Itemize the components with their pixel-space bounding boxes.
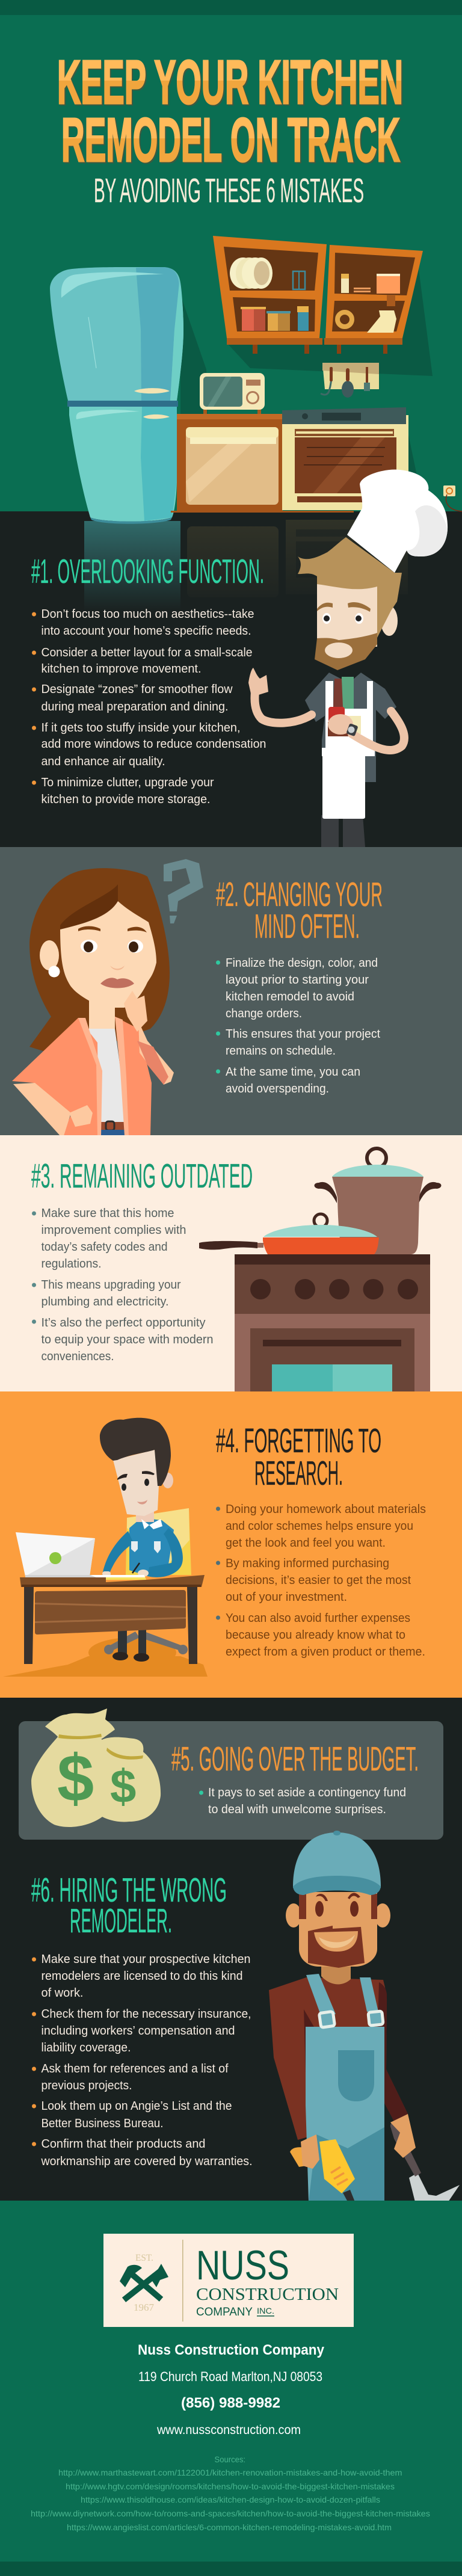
wordmark [196,2242,339,2319]
pen and hand [102,1563,149,1577]
panel: mistake 6 hiring the wrong remodeler [31,1831,460,2202]
bullet list: You can also avoid further expenses [226,1612,410,1625]
bullet list: regulations. [41,1257,101,1271]
tee [88,1029,128,1125]
bullet list [32,1207,213,1363]
hammer [390,2122,460,2202]
shirt [305,673,396,782]
chef illustration [248,470,448,847]
icon: utensil rack [321,363,379,398]
bullet list: previous projects. [41,2079,132,2092]
panel: mistake 3 remaining outdated [0,1135,462,1391]
bullet list [32,608,266,806]
bullet list: Designate “zones” for smoother flow [41,683,233,696]
man at desk illustration [3,1418,208,1677]
bullet list: remains on schedule. [226,1044,336,1058]
bullet list: By making informed purchasing [226,1557,389,1570]
bullet list: to equip your space with modern [41,1333,213,1346]
hair [29,868,170,1059]
bullet list: expect from a given product or theme. [226,1645,425,1659]
bullet list: Look them up on Angie’s List and the [41,2100,232,2113]
facial features [78,926,147,988]
head [286,1892,390,1968]
bullet list: At the same time, you can [226,1065,360,1079]
sources: https://www.angieslist.com/articles/6-common-kitchen-remodeling-mistakes-avoid.htm [67,2522,392,2532]
bullet list: Better Business Bureau. [41,2117,164,2130]
notebook [90,1575,146,1580]
kitchen reflection [84,520,408,611]
bullet list: Make sure that this home [41,1207,174,1220]
bullet list: layout prior to starting your [226,973,369,987]
bullet list: including workers’ compensation and [41,2024,235,2038]
woman illustration [12,868,174,1136]
face [60,901,156,1008]
neck [321,1964,351,1984]
wordmark: INC. [257,2306,274,2316]
icon: jars [241,274,400,333]
bullet list: Make sure that your prospective kitchen [41,1953,250,1966]
heading [216,1422,381,1493]
legs and shoes [118,1629,146,1654]
thumbs up hand [248,668,268,695]
logo [103,2234,354,2327]
est date: EST. [135,2253,153,2263]
bullet list: out of your investment. [226,1591,347,1604]
icon: wall cabinets [213,236,423,354]
wordmark: CONSTRUCTION [196,2285,339,2304]
hands [301,2114,416,2169]
bullet list: conveniences. [41,1350,114,1363]
arms [254,692,404,750]
overalls [306,1974,384,2202]
bullet list: Doing your homework about materials [226,1503,426,1516]
icon: counter cabinet [177,414,283,511]
shirt [269,1977,408,2140]
bullet text [199,1786,406,1816]
arms [13,1083,71,1136]
heading [31,1871,227,1940]
bullet list: To minimize clutter, upgrade your [41,776,214,789]
chair back [126,1508,191,1575]
contact details: Nuss Construction Company [138,2342,325,2358]
sources: http://www.hgtv.com/design/rooms/kitchens/how-to-avoid-the-biggest-kitchen-mistakes [66,2482,395,2491]
bullet list: change orders. [226,1007,302,1020]
bullet list: This means upgrading your [41,1278,181,1292]
pot [314,1148,442,1254]
icon: plates [230,257,273,289]
icon: crossed hammer and saw [120,2264,168,2300]
bullet list: kitchen to provide more storage. [41,793,211,806]
wall shadows [180,264,433,499]
bullet list: remodelers are licensed to do this kind [41,1970,243,1983]
icon: fridge [50,267,183,524]
belt and jeans [96,1122,128,1130]
panel: hero [0,0,462,511]
icon: socket [443,485,462,511]
icon: microwave [200,373,265,414]
heading [216,875,383,946]
laptop [16,1532,106,1582]
bullet list: and color schemes helps ensure you [226,1520,413,1533]
bullet list [216,957,380,1095]
title [57,48,403,174]
kitchen illustration [50,236,462,524]
contact details: www.nussconstruction.com [156,2423,301,2437]
bullet list: Ask them for references and a list of [41,2062,229,2075]
bullet list: and enhance air quality. [41,755,165,768]
heading: RESEARCH. [254,1454,343,1493]
pants [321,815,365,847]
bullet list: Don’t focus too much on aesthetics--take [41,608,254,621]
head [298,537,402,670]
heading: REMODELER. [70,1902,172,1940]
chef hat [347,470,448,573]
icon: question mark [164,859,203,923]
panel: footer [0,2201,462,2576]
icon: money bags: $ [110,1760,136,1813]
bullet list: Check them for the necessary insurance, [41,2007,251,2021]
bullet list: Consider a better layout for a small-scale [41,646,253,659]
contact details: (856) 988-9982 [181,2395,280,2411]
icon: oven [282,407,408,510]
panel: mistake 6 hiring the wrong remodeler: #6. HIRING THE WRONG [31,1871,227,1909]
wordmark: COMPANY [196,2306,253,2319]
drill [290,2139,355,2202]
bullet list [32,1953,253,2168]
bullet text: to deal with unwelcome surprises. [208,1803,386,1816]
sources: http://www.diynetwork.com/how-to/rooms-and-spaces/kitchen/how-to-avoid-the-biggest-kitchen-mistakes [31,2509,430,2518]
bullet list: kitchen remodel to avoid [226,990,354,1003]
bullet list: liability coverage. [41,2041,131,2054]
chair base [104,1632,188,1654]
contact details: 119 Church Road Marlton,NJ 08053 [138,2369,322,2384]
contact details [138,2342,325,2437]
bullet list: during meal preparation and dining. [41,700,229,713]
panel: mistake 2 changing your mind [0,847,462,1136]
bullet list: decisions, it’s easier to get the most [226,1574,411,1587]
torso and head [100,1418,183,1577]
panel: mistake 5 going over the budget [19,1709,443,1840]
wordmark: NUSS [196,2242,289,2288]
bullet list: It’s also the perfect opportunity [41,1316,206,1330]
bullet list: avoid overspending. [226,1082,329,1095]
bullet list: because you already know what to [226,1628,405,1642]
panel: mistake 1 overlooking function [0,511,462,847]
founded date: 1967 [134,2302,154,2313]
dollar signs: $ [57,1742,94,1816]
bullet list: Confirm that their products and [41,2137,206,2151]
jacket [12,1018,99,1136]
sources [31,2454,430,2532]
cap [293,1831,381,1895]
bullet list: into account your home’s specific needs. [41,624,251,638]
bullet list [216,1503,426,1659]
bullet list: add more windows to reduce condensation [41,738,266,751]
panel: mistake 4 forgetting to research [0,1391,462,1698]
bullet list: today’s safety codes and [41,1240,167,1254]
bullet list: of work. [41,1986,83,2000]
panel: mistakes 5 and 6 background [0,1698,462,2201]
bullet list: plumbing and electricity. [41,1295,168,1308]
desk [20,1575,205,1664]
watch [346,723,359,736]
bullet list: This ensures that your project [226,1028,380,1041]
floor shadow [3,1638,208,1677]
bullet list: If it gets too stuffy inside your kitchen, [41,721,241,735]
worker illustration [269,1831,460,2202]
bullet list: kitchen to improve movement. [41,662,201,676]
sources: https://www.thisoldhouse.com/ideas/kitchen-design-how-to-avoid-dozen-pitfalls [81,2495,380,2504]
bullet list: improvement complies with [41,1224,186,1237]
sources: http://www.marthastewart.com/1122001/kitchen-renovation-mistakes-and-how-avoid-them [58,2468,402,2477]
apron [322,681,375,819]
bullet list: Finalize the design, color, and [226,957,378,970]
pan [199,1214,379,1254]
bullet list: get the look and feel you want. [226,1536,386,1550]
stove illustration [199,1148,442,1391]
icon: money bags [31,1709,161,1827]
bottle [328,679,351,736]
bullet list: workmanship are covered by warranties. [41,2155,253,2168]
sources: Sources: [214,2454,245,2464]
bullet text: It pays to set aside a contingency fund [208,1786,406,1799]
